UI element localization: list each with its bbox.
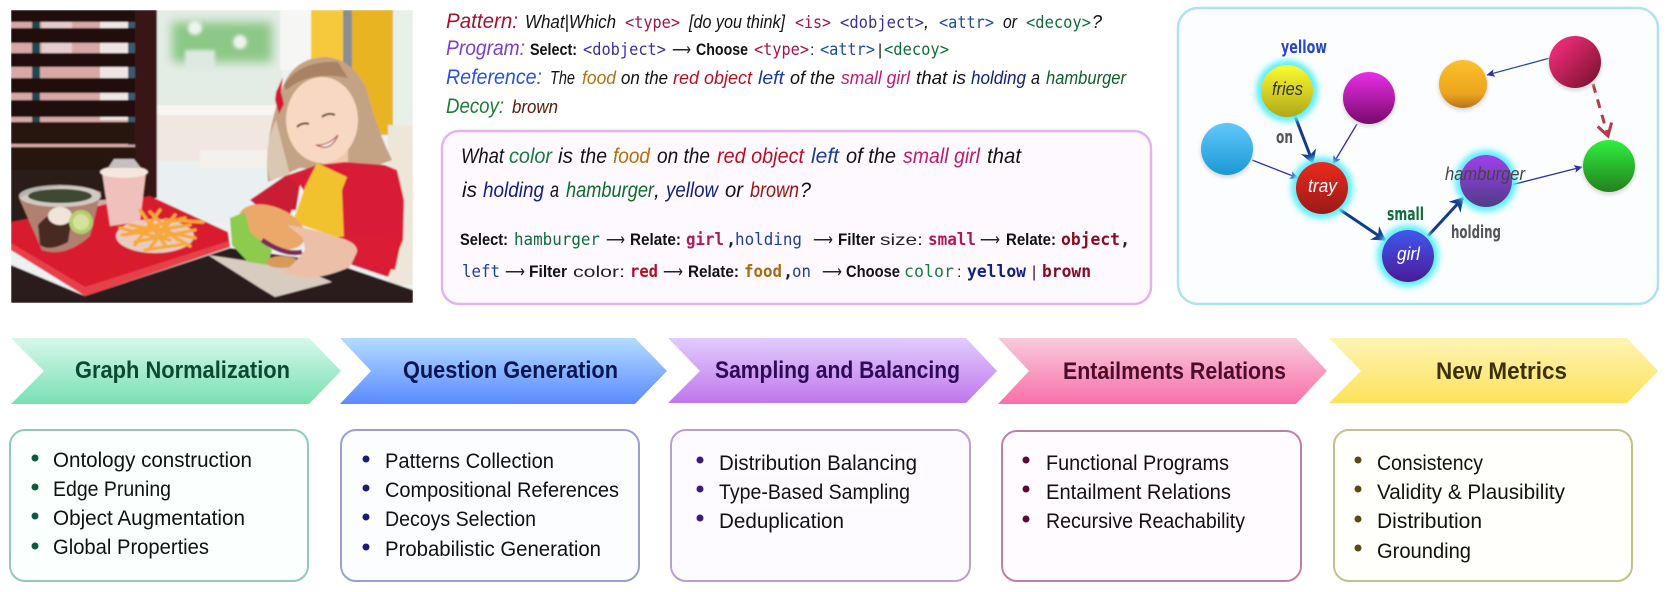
question text: ?	[800, 179, 811, 202]
heading: reference line: that is	[916, 68, 966, 88]
heading: program line	[446, 37, 949, 60]
question text: that	[987, 145, 1022, 168]
functional program text: ,	[726, 230, 736, 250]
functional program text: hamburger	[514, 230, 600, 250]
chevron: New Metrics	[1329, 338, 1658, 403]
question text: on the	[657, 145, 710, 168]
arrow: tray to girl	[1339, 209, 1385, 240]
arrow: girl to hamburger	[1428, 198, 1463, 236]
panel: Graph Normalization list	[10, 430, 308, 581]
functional program text: ⟶	[813, 232, 833, 249]
node: magenta	[1342, 72, 1396, 127]
label: yellow: yellow	[1281, 37, 1327, 58]
label: holding: holding	[1451, 222, 1501, 243]
question text: or	[725, 179, 744, 202]
heading: reference line: red object	[673, 68, 753, 88]
panel: Question Generation list: Compositional References	[385, 479, 619, 502]
heading: reference line: left	[758, 68, 785, 88]
chevron: Entailments Relations: Entailments Relations	[1063, 358, 1286, 385]
heading: program line: |	[878, 42, 882, 59]
panel: Question Generation list	[341, 430, 639, 581]
panel: scene graph	[1178, 8, 1658, 304]
heading: program line: <attr>	[820, 40, 875, 60]
panel: Graph Normalization list: Object Augmentation	[53, 507, 245, 530]
arrow: blue node to tray	[1252, 160, 1298, 178]
node: orange	[1438, 60, 1488, 111]
question text: is	[558, 145, 573, 168]
heading: program line: :	[810, 42, 814, 59]
heading: reference line: holding	[971, 68, 1026, 88]
question text: of the	[846, 145, 896, 168]
node: fries	[1256, 60, 1318, 122]
question text: a	[550, 179, 559, 202]
panel: Question Generation list: Patterns Collection	[385, 450, 554, 473]
panel: Graph Normalization list: Global Properties	[53, 536, 209, 559]
functional program text: Relate:	[1006, 230, 1056, 249]
heading: pattern line: <attr>	[939, 13, 994, 33]
functional program text: color:	[573, 264, 625, 281]
panel: Entailments Relations list: Entailment Relations	[1046, 481, 1231, 504]
heading: decoy line: brown	[512, 97, 558, 117]
functional program text	[460, 230, 1130, 282]
functional program text: Relate:	[630, 230, 681, 249]
functional program text: ⟶	[980, 232, 1000, 249]
heading: program line: <dobject>	[583, 40, 666, 60]
panel: New Metrics list: Grounding	[1377, 540, 1471, 563]
functional program text: holding	[735, 230, 802, 250]
functional program text: color	[904, 262, 954, 282]
label: on: on	[1276, 127, 1293, 148]
heading: pattern line: [do you think]	[688, 12, 786, 32]
node: fries: fries	[1272, 79, 1303, 99]
heading: reference line: food	[582, 68, 617, 88]
functional program text: Filter	[838, 230, 875, 249]
panel: New Metrics list: Distribution	[1377, 510, 1482, 533]
arrow: pink node to orange node	[1487, 58, 1550, 75]
functional program text: Filter	[529, 262, 567, 281]
functional program text: ,	[1120, 230, 1130, 250]
functional program text: ⟶	[822, 264, 842, 281]
chevron: Question Generation: Question Generation	[403, 357, 618, 384]
heading: reference line: of the	[790, 68, 835, 88]
heading: pattern line: <type>	[625, 13, 680, 33]
question text: red object	[717, 145, 805, 168]
heading: reference line: small girl	[841, 68, 911, 88]
functional program text: Select:	[460, 230, 508, 249]
functional program text: left	[462, 262, 500, 282]
functional program text: ⟶	[505, 264, 525, 281]
question text: is	[462, 179, 477, 202]
question text	[461, 145, 1022, 202]
arrow: dashed pink node to green node	[1593, 84, 1608, 136]
heading: decoy line	[446, 95, 558, 118]
heading: program line: Select:	[530, 40, 577, 59]
functional program text: on	[792, 262, 811, 282]
heading: pattern line: <dobject>	[840, 13, 924, 33]
heading: pattern line: ?	[1092, 12, 1102, 32]
chevron: Graph Normalization: Graph Normalization	[75, 357, 290, 384]
heading: pattern line: <decoy>	[1026, 13, 1091, 33]
heading: decoy line: Decoy:	[446, 95, 504, 118]
panel: New Metrics list: Consistency	[1377, 452, 1483, 475]
panel: Graph Normalization list: Ontology construction	[53, 449, 252, 472]
heading: program line: <type>	[754, 40, 809, 60]
heading: pattern line: Pattern:	[446, 10, 518, 33]
panel: Entailments Relations list: Functional Programs	[1046, 452, 1229, 475]
node: girl	[1377, 225, 1439, 287]
question text: small girl	[903, 145, 981, 168]
functional program text: Relate:	[688, 262, 739, 281]
heading: reference line: on the	[621, 68, 668, 88]
heading: pattern line: What|Which	[525, 12, 616, 32]
heading: pattern line: or	[1003, 12, 1018, 32]
functional program text: food	[744, 262, 782, 282]
node: hamburger: hamburger	[1445, 164, 1526, 184]
panel: Entailments Relations list: Recursive Reachability	[1046, 510, 1245, 533]
heading: reference line: hamburger	[1046, 68, 1127, 88]
question text: ,	[654, 179, 660, 202]
panel: Sampling and Balancing list: Distribution Balancing	[719, 452, 917, 475]
node: blue	[1200, 123, 1254, 178]
functional program text: brown	[1042, 262, 1091, 282]
node: hamburger	[1445, 150, 1526, 212]
node: girl: girl	[1397, 244, 1421, 264]
panel: question and program	[442, 131, 1151, 304]
panel: Graph Normalization list: Edge Pruning	[53, 478, 171, 501]
functional program text: ⟶	[606, 232, 625, 249]
heading: reference line: The	[550, 68, 575, 88]
functional program text: yellow	[967, 262, 1027, 282]
question text: What	[461, 145, 505, 168]
heading: program line: Program:	[446, 37, 525, 60]
heading: reference line: a	[1031, 68, 1040, 88]
heading: program line: Choose	[696, 40, 748, 59]
question text: color	[509, 145, 553, 168]
heading: program line: ⟶	[672, 42, 691, 59]
chevron: New Metrics: New Metrics	[1436, 358, 1567, 385]
node: tray: tray	[1308, 176, 1338, 196]
chevron: Entailments Relations	[998, 338, 1327, 404]
heading: pattern line: <is>	[795, 13, 831, 33]
panel: New Metrics list: Validity & Plausibility	[1377, 481, 1565, 504]
panel: New Metrics list	[1334, 430, 1632, 581]
question text: food	[613, 145, 651, 168]
functional program text: :	[957, 264, 961, 281]
question text: holding	[483, 179, 544, 202]
chevron: Graph Normalization	[11, 338, 341, 404]
question text: brown	[750, 179, 799, 202]
heading: pattern line	[446, 10, 1102, 33]
heading: pattern line: ,	[924, 12, 929, 32]
question text: hamburger	[566, 179, 655, 202]
panel: Sampling and Balancing list	[671, 430, 970, 581]
heading: program line: <decoy>	[884, 40, 949, 60]
functional program text: Choose	[846, 262, 900, 281]
chevron: Sampling and Balancing	[668, 338, 997, 403]
panel: Sampling and Balancing list: Deduplication	[719, 510, 844, 533]
node: green	[1582, 140, 1636, 195]
question text: the	[580, 145, 607, 168]
chevron: Sampling and Balancing: Sampling and Balancing	[715, 357, 960, 384]
label: small: small	[1387, 204, 1424, 225]
panel: Question Generation list: Decoys Selection	[385, 508, 536, 531]
panel: Question Generation list: Probabilistic Generation	[385, 538, 601, 561]
functional program text: ⟶	[663, 264, 683, 281]
heading: reference line	[446, 66, 1127, 89]
heading: reference line: Reference:	[446, 66, 542, 89]
node: pink	[1548, 36, 1602, 91]
question text: left	[811, 145, 840, 168]
arrow: fries to tray	[1295, 116, 1313, 163]
panel: Sampling and Balancing list: Type-Based Sampling	[719, 481, 910, 504]
functional program text: ,	[783, 262, 793, 282]
functional program text: object	[1061, 230, 1120, 250]
functional program text: red	[630, 262, 658, 282]
arrow: hamburger to green node	[1511, 167, 1582, 185]
chevron: Question Generation	[340, 338, 667, 404]
arrow: magenta node to tray	[1333, 124, 1357, 164]
question text: yellow	[664, 179, 720, 202]
node: tray	[1291, 157, 1353, 219]
functional program text: size:	[880, 232, 923, 249]
photo: girl with hamburger at a restaurant table	[11, 10, 413, 303]
functional program text: |	[1032, 264, 1036, 281]
functional program text: small	[928, 230, 976, 250]
panel: Entailments Relations list	[1002, 431, 1301, 581]
functional program text: girl	[686, 230, 724, 250]
